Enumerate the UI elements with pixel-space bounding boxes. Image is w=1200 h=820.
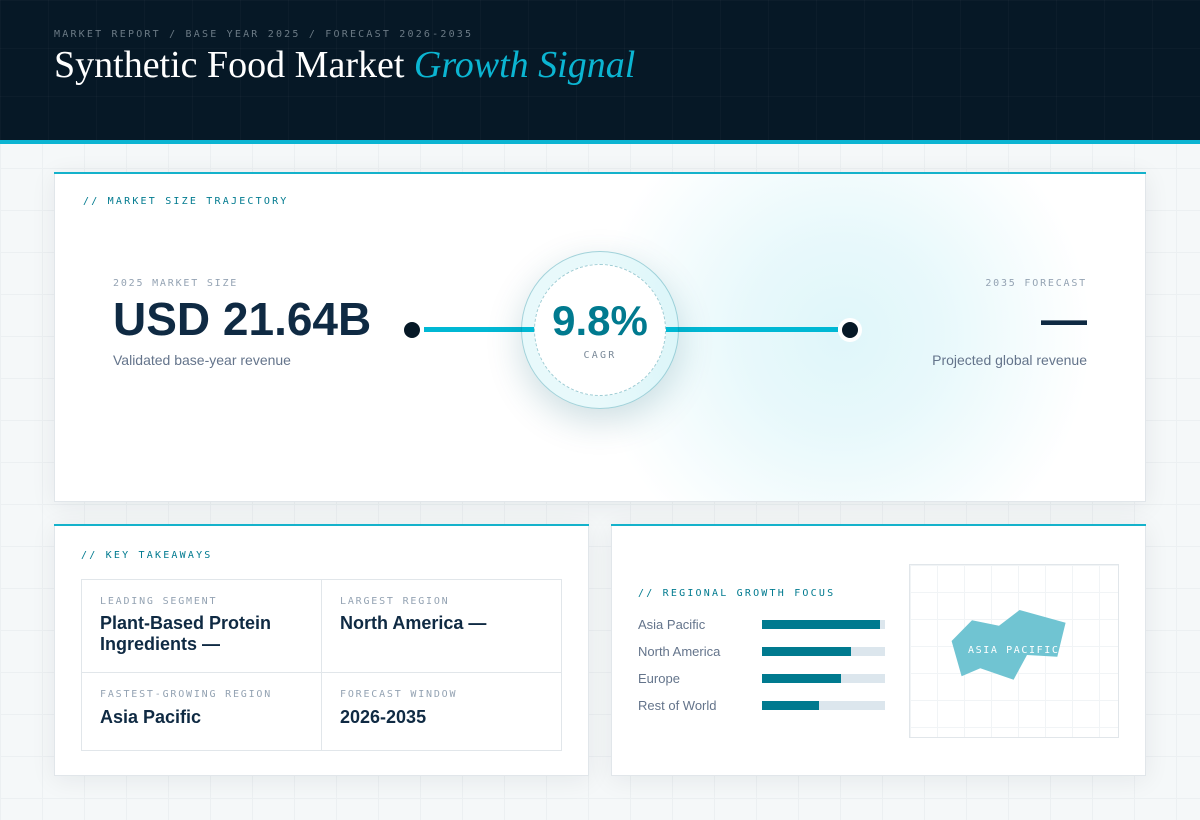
- cell value: Ingredients —: [100, 634, 220, 654]
- 2025 label: 2025 MARKET SIZE: [113, 278, 238, 289]
- region name: North America: [638, 644, 720, 659]
- CAGR label: CAGR: [584, 350, 616, 361]
- 2035 label: 2035 FORECAST: [985, 278, 1087, 289]
- section heading: // KEY TAKEAWAYS: [81, 550, 213, 561]
- cell: leading segment: [82, 580, 322, 673]
- region name: Rest of World: [638, 698, 717, 713]
- bar: [762, 701, 885, 710]
- header banner: [0, 0, 1200, 144]
- start marker: [400, 318, 424, 342]
- 2035 value: —: [1041, 293, 1087, 345]
- map label: ASIA PACIFIC: [968, 645, 1059, 656]
- section heading: // MARKET SIZE TRAJECTORY: [83, 196, 289, 207]
- bar: [762, 674, 885, 683]
- 2025 value: USD 21.64B: [113, 293, 371, 345]
- section heading: // REGIONAL GROWTH FOCUS: [638, 588, 835, 599]
- map shape: Asia Pacific: [952, 610, 1066, 680]
- region name: Europe: [638, 671, 680, 686]
- row: Asia Pacific: [638, 617, 885, 632]
- title: Synthetic Food Market Growth Signal: [54, 44, 635, 86]
- region name: Asia Pacific: [638, 617, 705, 632]
- row: Europe: [638, 671, 885, 686]
- 2035 caption: Projected global revenue: [932, 352, 1087, 368]
- trajectory connector line: left: [424, 327, 536, 332]
- end marker: [838, 318, 862, 342]
- map panel: [909, 564, 1119, 738]
- cell label: FASTEST-GROWING REGION: [100, 689, 272, 700]
- CAGR inner disc: [534, 264, 666, 396]
- cell value: Asia Pacific: [100, 707, 201, 727]
- CAGR ring: [521, 251, 679, 409]
- panel: key takeaways: [54, 524, 589, 776]
- 2025 market size block: [113, 278, 371, 368]
- cell label: LARGEST REGION: [340, 596, 450, 607]
- cell value: North America —: [340, 613, 486, 633]
- panel: regional growth focus: [611, 524, 1146, 776]
- panel: market size trajectory: [54, 172, 1146, 502]
- regional bar chart: [638, 617, 885, 713]
- trajectory connector line: right: [664, 327, 838, 332]
- cell value: 2026-2035: [340, 707, 426, 727]
- cell: forecast window: [340, 689, 457, 727]
- bar: [762, 620, 885, 629]
- eyebrow text: MARKET REPORT / BASE YEAR 2025 / FORECAST 2026-2035: [54, 29, 473, 40]
- bar: [762, 647, 885, 656]
- cell label: LEADING SEGMENT: [100, 596, 217, 607]
- row: Rest of World: [638, 698, 885, 713]
- cell value: Plant-Based Protein: [100, 613, 271, 633]
- takeaways table: [81, 579, 562, 751]
- cell: fastest-growing region: [82, 673, 322, 750]
- cell: largest region: [322, 580, 561, 673]
- 2025 caption: Validated base-year revenue: [113, 352, 291, 368]
- row: North America: [638, 644, 885, 659]
- CAGR value: 9.8%: [552, 297, 648, 344]
- cell label: FORECAST WINDOW: [340, 689, 457, 700]
- cell value: [100, 613, 271, 654]
- 2035 forecast block: [932, 278, 1087, 368]
